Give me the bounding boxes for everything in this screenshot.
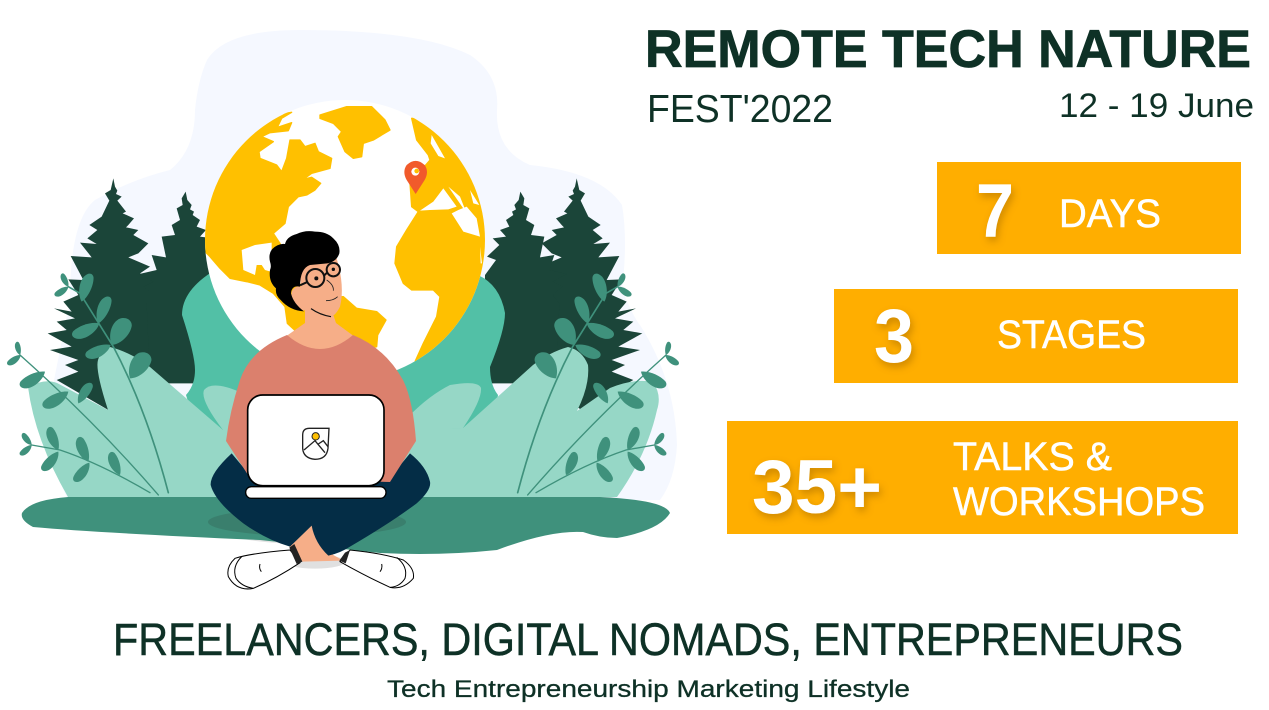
label days: DAYS <box>1059 192 1161 236</box>
trousers <box>211 453 430 556</box>
face <box>291 258 342 317</box>
head <box>269 231 342 317</box>
title: REMOTE TECH NATURE <box>645 20 1251 79</box>
number 3: 3 <box>874 294 914 379</box>
floor shadow under feet <box>285 555 345 569</box>
inland seas <box>420 135 482 263</box>
illustration: person with laptop in front of globe and forest <box>6 30 680 589</box>
right trees <box>483 178 642 410</box>
stat box: 35+ talks and workshops <box>727 421 1238 534</box>
jaw line <box>311 309 331 317</box>
laptop lid <box>248 395 384 486</box>
ground shadow <box>208 508 406 536</box>
right sprigs <box>518 271 680 495</box>
Gulf of Mexico <box>242 242 272 275</box>
globe <box>205 100 485 370</box>
neck <box>285 300 355 365</box>
laptop base <box>246 487 386 498</box>
location pin <box>404 161 427 194</box>
person <box>211 231 430 589</box>
ground <box>22 497 670 554</box>
big light green leaves <box>28 347 659 497</box>
audience heading: FREELANCERS, DIGITAL NOMADS, ENTREPRENEURS <box>113 614 1183 665</box>
right shoe <box>339 550 414 588</box>
number 35+: 35+ <box>752 445 882 530</box>
left shoe <box>228 544 302 589</box>
laptop <box>246 395 386 498</box>
laptop logo <box>303 428 329 459</box>
label stages: STAGES <box>997 313 1146 357</box>
teal hill behind globe <box>182 270 505 440</box>
Greenland <box>320 107 390 158</box>
small light leaf left <box>203 385 250 430</box>
topics line: Tech Entrepreneurship Marketing Lifestyle <box>387 676 910 703</box>
small light leaf right <box>410 383 481 430</box>
bare shins <box>289 523 343 562</box>
stat box: 7 days <box>937 162 1241 254</box>
subtitle: fest: FEST'2022 <box>647 88 833 131</box>
left sprigs <box>6 271 168 495</box>
eyes <box>314 268 335 280</box>
nose and smile <box>326 280 338 301</box>
hair <box>269 231 340 311</box>
glasses <box>300 263 340 287</box>
Europe Africa Asia <box>394 118 485 362</box>
Americas <box>205 112 387 348</box>
shirt <box>226 335 416 482</box>
label workshops: WORKSHOPS <box>953 480 1205 524</box>
background blob <box>47 30 677 500</box>
lower body <box>211 453 430 589</box>
soft floor shadow <box>215 508 399 544</box>
globe ocean <box>205 100 485 380</box>
dates: 12 - 19 June <box>1059 87 1254 125</box>
number 7: 7 <box>976 169 1014 254</box>
label talks: TALKS & <box>953 435 1112 479</box>
continents <box>205 106 485 362</box>
left trees <box>48 178 223 410</box>
stat box: 3 stages <box>834 289 1238 383</box>
